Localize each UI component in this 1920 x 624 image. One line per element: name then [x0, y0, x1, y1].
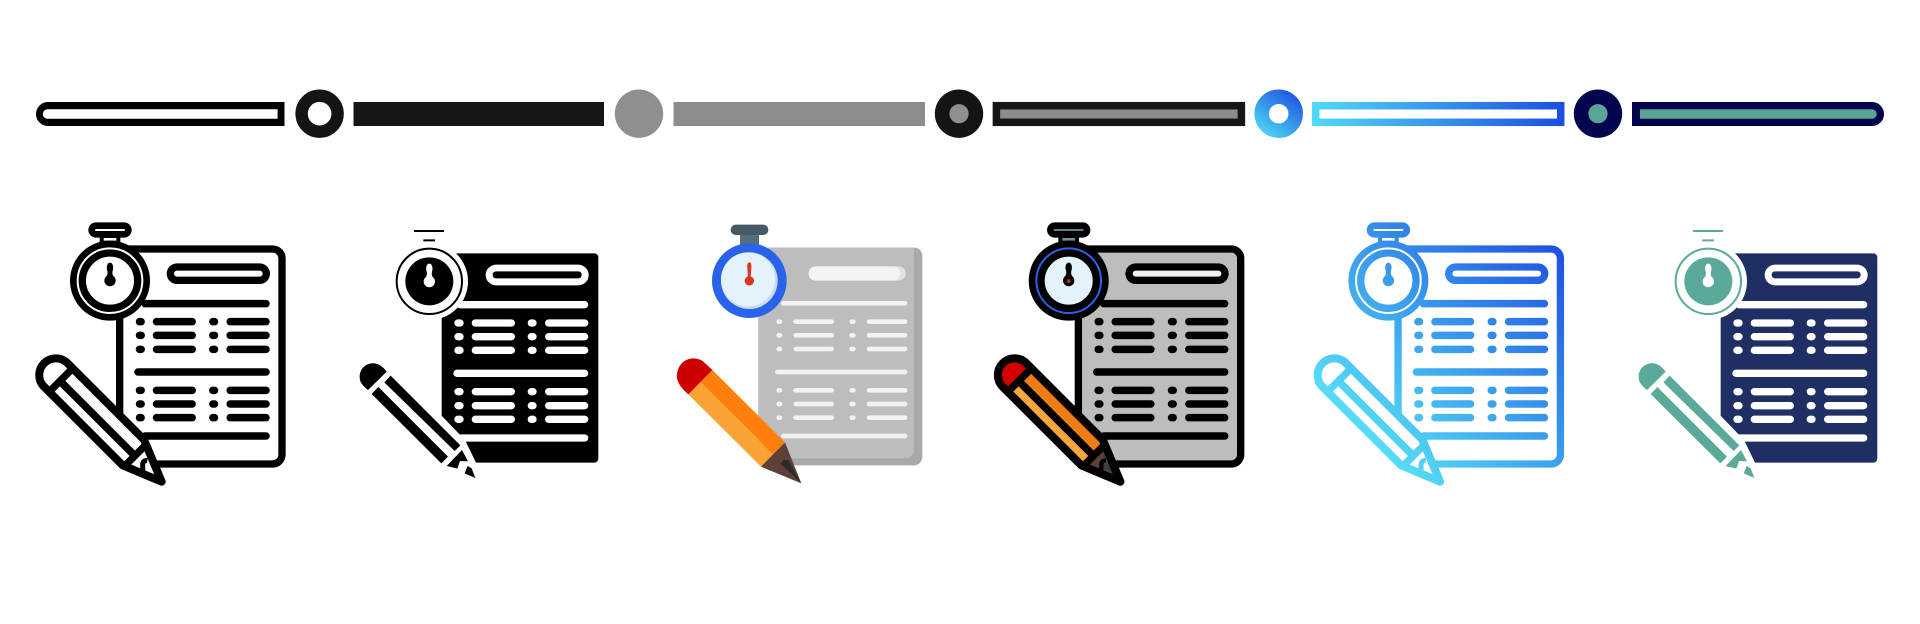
stopwatch [1670, 231, 1747, 320]
stopwatch [391, 231, 468, 320]
sheet [1721, 253, 1877, 463]
rows [138, 304, 266, 436]
pencil [39, 358, 162, 482]
icon: filled line test sheet with stopwatch and pencil [998, 226, 1241, 482]
icon: flat colour test sheet with stopwatch and pencil [677, 225, 922, 483]
pencil [677, 358, 801, 483]
sheet [758, 248, 922, 465]
circle: flat style [615, 90, 663, 138]
title pill [809, 266, 906, 281]
title pill [1129, 267, 1225, 280]
ring: outline style [302, 96, 338, 132]
bar: filled line style [996, 106, 1241, 122]
title pill [1765, 265, 1868, 285]
ring: filled line style [935, 90, 983, 138]
bar centre: two-tone style [1640, 109, 1877, 119]
pencil [1318, 358, 1440, 482]
rows [1416, 304, 1544, 436]
bar: two-tone style [1632, 102, 1884, 126]
rows [777, 303, 905, 436]
icon: two-tone glyph test sheet with stopwatch and pencil [1639, 231, 1877, 478]
bar: flat style [674, 102, 925, 126]
ring: two-tone style [1574, 90, 1622, 138]
pencil [1639, 363, 1754, 478]
sheet [120, 249, 282, 464]
title pill [170, 267, 266, 280]
stopwatch [1032, 226, 1105, 317]
icon: glyph test sheet with stopwatch and pencil [360, 231, 598, 478]
sheet [1078, 249, 1241, 464]
stopwatch [1352, 226, 1425, 317]
icon: outline test sheet with stopwatch and pencil [39, 226, 282, 482]
sheet cut-outs for pencil [438, 414, 477, 468]
title pill [1449, 267, 1545, 280]
rows [457, 305, 585, 438]
rows [1736, 305, 1864, 438]
sheet cut-outs for pencil [1717, 414, 1756, 468]
title pill [486, 265, 589, 285]
stopwatch [73, 226, 147, 317]
ring centre: two-tone style [1588, 104, 1608, 123]
sheet [442, 253, 598, 463]
ring: gradient style [1262, 97, 1296, 131]
icon: gradient test sheet with stopwatch and pencil [1318, 226, 1560, 482]
sheet [1398, 249, 1560, 464]
ring centre: filled line style [949, 104, 969, 123]
pencil [998, 358, 1120, 482]
bar: outline style [36, 102, 284, 126]
bar: glyph style [354, 102, 604, 126]
style strip: bars and rings [36, 90, 1884, 138]
bar: gradient style [1316, 106, 1561, 122]
stopwatch [712, 225, 787, 318]
rows [1097, 304, 1225, 436]
pencil [360, 363, 475, 478]
